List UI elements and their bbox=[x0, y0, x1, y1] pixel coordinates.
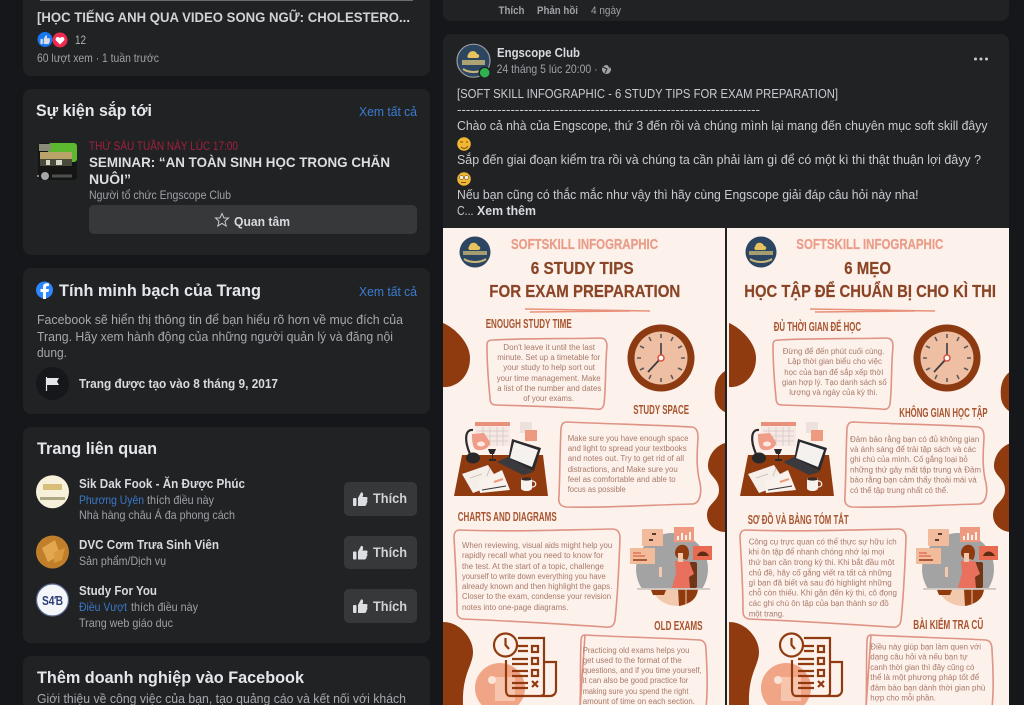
section: study space: bảo rằng bạn cảm thấy thoải mái và bbox=[850, 476, 977, 485]
section: old exams: thể là một phương pháp tốt để bbox=[870, 673, 980, 682]
section: enough study time: Lập thời gian biểu cho việc bbox=[788, 357, 882, 366]
logo bbox=[746, 236, 776, 268]
icon: dizzy emoji bbox=[457, 172, 471, 186]
section: old exams: dạng câu hỏi và nếu bạn tự bbox=[870, 653, 968, 662]
post text: Xem thêm bbox=[477, 203, 536, 218]
interested button: Quan tâm bbox=[234, 214, 290, 229]
related page: DVC Cơm Trưa Sinh Viên: DVC Cơm Trưa Sinh Viên bbox=[79, 537, 219, 552]
section: study space: và ánh sáng để trải tập sách và các bbox=[850, 445, 976, 454]
icon: clock bbox=[914, 324, 980, 392]
main title: 6 STUDY TIPS bbox=[531, 258, 634, 278]
icon: like and love reactions bbox=[38, 32, 68, 48]
post text: Nếu bạn cũng có thắc mắc như vậy thì hãy cùng Engscope giải đáp câu hỏi này nha! bbox=[457, 187, 919, 202]
illustration: study desk bbox=[740, 422, 834, 496]
post author: Engscope Club bbox=[497, 45, 580, 60]
section: old exams: questions, and if you time yourself, bbox=[583, 666, 702, 675]
section: enough study time: lượng và ngày của kỳ thi. bbox=[789, 388, 878, 397]
transparency description: Facebook sẽ hiển thị thông tin để bạn hiểu rõ hơn về mục đích của bbox=[37, 312, 404, 327]
panel: upcoming events bbox=[23, 89, 430, 255]
post date: 24 tháng 5 lúc 20:00 · bbox=[497, 62, 598, 76]
main title bbox=[744, 258, 996, 301]
section: charts and diagrams bbox=[740, 512, 906, 627]
main title: FOR EXAM PREPARATION bbox=[489, 281, 680, 301]
heading: related pages: Trang liên quan bbox=[37, 439, 157, 458]
section: charts and diagrams: thứ bạn cần trong kỳ thi. Khi bắt đầu một bbox=[749, 558, 895, 567]
heading: page transparency: Tính minh bạch của Trang bbox=[59, 281, 261, 300]
post text bbox=[457, 86, 988, 218]
heading: add business: Thêm doanh nghiệp vào Facebook bbox=[37, 668, 305, 687]
icon: winking emoji bbox=[457, 137, 471, 151]
related page: Study For You: thích điều này bbox=[131, 600, 198, 614]
related page: DVC Cơm Trưa Sinh Viên bbox=[36, 536, 417, 569]
related page: Study For You: Trang web giáo dục bbox=[79, 616, 173, 630]
icon: clock bbox=[628, 324, 694, 392]
illustration: study desk bbox=[454, 422, 548, 496]
section: old exams bbox=[580, 618, 707, 705]
section: enough study time: Don't leave it until the last bbox=[503, 343, 596, 352]
infographic: Vietnamese version bbox=[727, 228, 1009, 705]
transparency description: Trang. Hãy xem hành động của những người quản lý và đăng nội bbox=[37, 329, 393, 344]
infographic: English version bbox=[443, 228, 725, 705]
comment actions: 4 ngày bbox=[591, 5, 621, 17]
section: old exams: making sure you spend the right bbox=[583, 687, 689, 696]
icon: exam checklist bbox=[761, 634, 842, 705]
section: enough study time: of your exams. bbox=[523, 394, 574, 403]
section: study space: Đảm bảo rằng bạn có đủ không gian bbox=[850, 435, 979, 444]
section: charts and diagrams: chủ đề, hãy cố gắng viết ra tất cả những bbox=[749, 568, 892, 577]
section: study space: feel as comfortable and able to bbox=[568, 475, 676, 484]
section: charts and diagrams: notes into one-page diagrams. bbox=[462, 603, 568, 612]
event thumbnail bbox=[37, 143, 77, 180]
section: charts and diagrams: yourself to write down everything you have bbox=[462, 572, 606, 581]
section: old exams: OLD EXAMS bbox=[654, 618, 703, 633]
icon: more menu bbox=[974, 58, 988, 60]
section: charts and diagrams: rapidly recall what you need to know for bbox=[462, 551, 604, 560]
heading: upcoming events: Sự kiện sắp tới bbox=[36, 101, 152, 120]
section: charts and diagrams: CHARTS AND DIAGRAMS bbox=[458, 509, 557, 524]
section: old exams: get used to the format of the bbox=[583, 656, 682, 665]
panel: related pages bbox=[23, 427, 430, 643]
section: study space: có thể tập trung nhất có thể. bbox=[850, 486, 948, 495]
section: enough study time: Đừng để đến phút cuối cùng. bbox=[783, 347, 884, 356]
panel: video card bbox=[23, 0, 430, 76]
transparency description bbox=[37, 312, 404, 360]
panel: add business bbox=[23, 656, 430, 705]
post text: C... bbox=[457, 203, 474, 218]
comment actions: Phản hồi bbox=[537, 5, 578, 17]
section: enough study time: học của bạn để sắp xếp thời bbox=[784, 368, 884, 377]
section: charts and diagrams: một trang. bbox=[749, 609, 784, 618]
post text: Sắp đến giai đoạn kiểm tra rồi và chúng ta cần phải làm gì để có một kì thi thật thuận lợi đâyy ? bbox=[457, 152, 981, 167]
section: charts and diagrams: các ghi chú ôn tập của bạn thành sơ đồ bbox=[749, 599, 889, 608]
section: study space bbox=[559, 402, 701, 507]
decorative brown blobs bbox=[443, 323, 725, 705]
section: study space bbox=[845, 405, 988, 507]
section: old exams bbox=[866, 617, 993, 705]
logo bbox=[460, 236, 490, 268]
related page: Study For You: Điều Vượt bbox=[79, 600, 128, 614]
related page: Study For You: Thích bbox=[373, 598, 407, 614]
reaction count: 12 bbox=[75, 33, 86, 47]
related page: Sik Dak Fook: thích điều này bbox=[147, 493, 214, 507]
section: charts and diagrams: the test. At the start of a topic, challenge bbox=[462, 562, 605, 571]
illustration: person with charts bbox=[916, 527, 998, 609]
related page: Sik Dak Fook: Phương Uyên bbox=[79, 493, 144, 507]
video title: [HỌC TIẾNG ANH QUA VIDEO SONG NGỮ: CHOLESTERO... bbox=[37, 8, 410, 25]
panel: page transparency bbox=[23, 268, 430, 414]
section: old exams: it can also be good practice for bbox=[583, 676, 689, 685]
related page: Sik Dak Fook: Sik Dak Fook - Ăn Được Phúc bbox=[79, 476, 245, 491]
see all link: Xem tất cả bbox=[359, 104, 418, 119]
section: charts and diagrams bbox=[454, 509, 620, 627]
section: charts and diagrams: SƠ ĐỒ VÀ BẢNG TÓM TẮT bbox=[748, 512, 849, 527]
post avatar bbox=[457, 44, 490, 78]
section: charts and diagrams: already known and then highlight the gaps. bbox=[462, 582, 612, 591]
event title bbox=[89, 154, 390, 187]
related page: Study For You: Study For You bbox=[79, 583, 157, 598]
section: enough study time: minute. Set up a timetable for bbox=[497, 353, 601, 362]
section: study space: ghi chú của mình. Cố gắng loại bỏ bbox=[850, 455, 968, 464]
illustration: person with charts bbox=[630, 527, 712, 609]
related page: DVC Cơm Trưa Sinh Viên: Sản phẩm/Dịch vụ bbox=[79, 554, 166, 568]
section: enough study time: your study to help sort out bbox=[503, 363, 596, 372]
decorative brown blobs bbox=[729, 323, 1011, 705]
related page: Sik Dak Fook: Nhà hàng châu Á đa phong cách bbox=[79, 507, 235, 522]
post text: Chào cả nhà của Engscope, thứ 3 đến rồi và chúng mình lại mang đến chuyên mục soft skill đâyy bbox=[457, 118, 988, 133]
event title: SEMINAR: “AN TOÀN SINH HỌC TRONG CHĂN bbox=[89, 154, 390, 170]
series label: SOFTSKILL INFOGRAPHIC bbox=[511, 237, 658, 253]
post text: -------------------------------------------------------------------- bbox=[457, 102, 760, 117]
section: charts and diagrams: gì bạn đã biết và sau đó highlight những bbox=[749, 579, 892, 588]
section: old exams: Practicing old exams helps you bbox=[583, 646, 689, 655]
comment actions bbox=[498, 5, 621, 17]
section: old exams: đảm bảo bạn dành thời gian phù bbox=[870, 683, 985, 692]
main title bbox=[489, 258, 680, 301]
icon: globe bbox=[602, 65, 611, 74]
section: old exams: hợp cho mỗi phần. bbox=[870, 693, 936, 702]
event date: THỨ SÁU TUẦN NÀY LÚC 17:00 bbox=[89, 138, 238, 153]
section: charts and diagrams: khi ôn tập để nhanh chóng nhớ lại mọi bbox=[749, 548, 885, 557]
section: old exams: Điều này giúp bạn làm quen với bbox=[870, 642, 981, 651]
video stats: 60 lượt xem · 1 tuần trước bbox=[37, 51, 159, 65]
section: old exams: canh thời gian thì đây cũng có bbox=[870, 663, 975, 672]
section: enough study time: a list of the number and dates bbox=[497, 384, 601, 393]
section: charts and diagrams: chỗ còn thiếu. Khi gần đến kỳ thi, cô đọng bbox=[749, 589, 897, 598]
related page: Sik Dak Fook: Thích bbox=[373, 490, 407, 506]
section: study space: and light to spread your textbooks bbox=[568, 444, 687, 453]
section: enough study time bbox=[486, 316, 607, 409]
comment actions: Thích bbox=[498, 5, 525, 17]
related page: Study For You bbox=[36, 583, 417, 630]
related page: DVC Cơm Trưa Sinh Viên: Thích bbox=[373, 544, 407, 560]
panel: Engscope post bbox=[443, 34, 1009, 705]
section: charts and diagrams: Closer to the exam, condense your revision bbox=[462, 592, 611, 601]
main title: 6 MẸO bbox=[844, 258, 891, 278]
section: study space: Make sure you have enough space bbox=[568, 434, 689, 443]
section: enough study time: ENOUGH STUDY TIME bbox=[486, 316, 572, 331]
series label: SOFTSKILL INFOGRAPHIC bbox=[796, 237, 944, 253]
event title: NUÔI” bbox=[89, 170, 131, 187]
see all link: Xem tất cả bbox=[359, 284, 418, 299]
section: enough study time: your time management. Make bbox=[497, 374, 601, 383]
related page: Study For You: S4Ɓ bbox=[42, 593, 63, 608]
section: study space: focus as possible bbox=[568, 485, 626, 494]
related page: Sik Dak Fook bbox=[36, 475, 417, 522]
event organizer: Người tổ chức Engscope Club bbox=[89, 188, 231, 202]
page creation date: Trang được tạo vào 8 tháng 9, 2017 bbox=[79, 376, 278, 391]
section: study space: distractions, and Make sure you bbox=[568, 465, 678, 474]
section: study space: những thứ gây mất tập trung và Đảm bbox=[850, 465, 981, 474]
transparency description: dung. bbox=[37, 345, 67, 360]
post text: [SOFT SKILL INFOGRAPHIC - 6 STUDY TIPS FOR EXAM PREPARATION] bbox=[457, 86, 838, 101]
icon: facebook logo bbox=[36, 282, 53, 299]
icon: flag bbox=[36, 367, 69, 400]
section: enough study time: gian hợp lý. Tạo danh sách số bbox=[782, 378, 887, 387]
section: study space: STUDY SPACE bbox=[633, 402, 689, 417]
section: enough study time: ĐỦ THỜI GIAN ĐỂ HỌC bbox=[774, 319, 861, 334]
interested button bbox=[89, 205, 417, 234]
section: charts and diagrams: When reviewing, visual aids might help you bbox=[462, 541, 612, 550]
panel: previous comment card bbox=[443, 0, 1009, 21]
section: enough study time bbox=[773, 319, 893, 409]
section: study space: and notes out. Try to get rid of all bbox=[568, 454, 684, 463]
icon: exam checklist bbox=[475, 634, 556, 705]
section: charts and diagrams: Công cụ trực quan có thể thực sự hữu ích bbox=[749, 537, 897, 546]
